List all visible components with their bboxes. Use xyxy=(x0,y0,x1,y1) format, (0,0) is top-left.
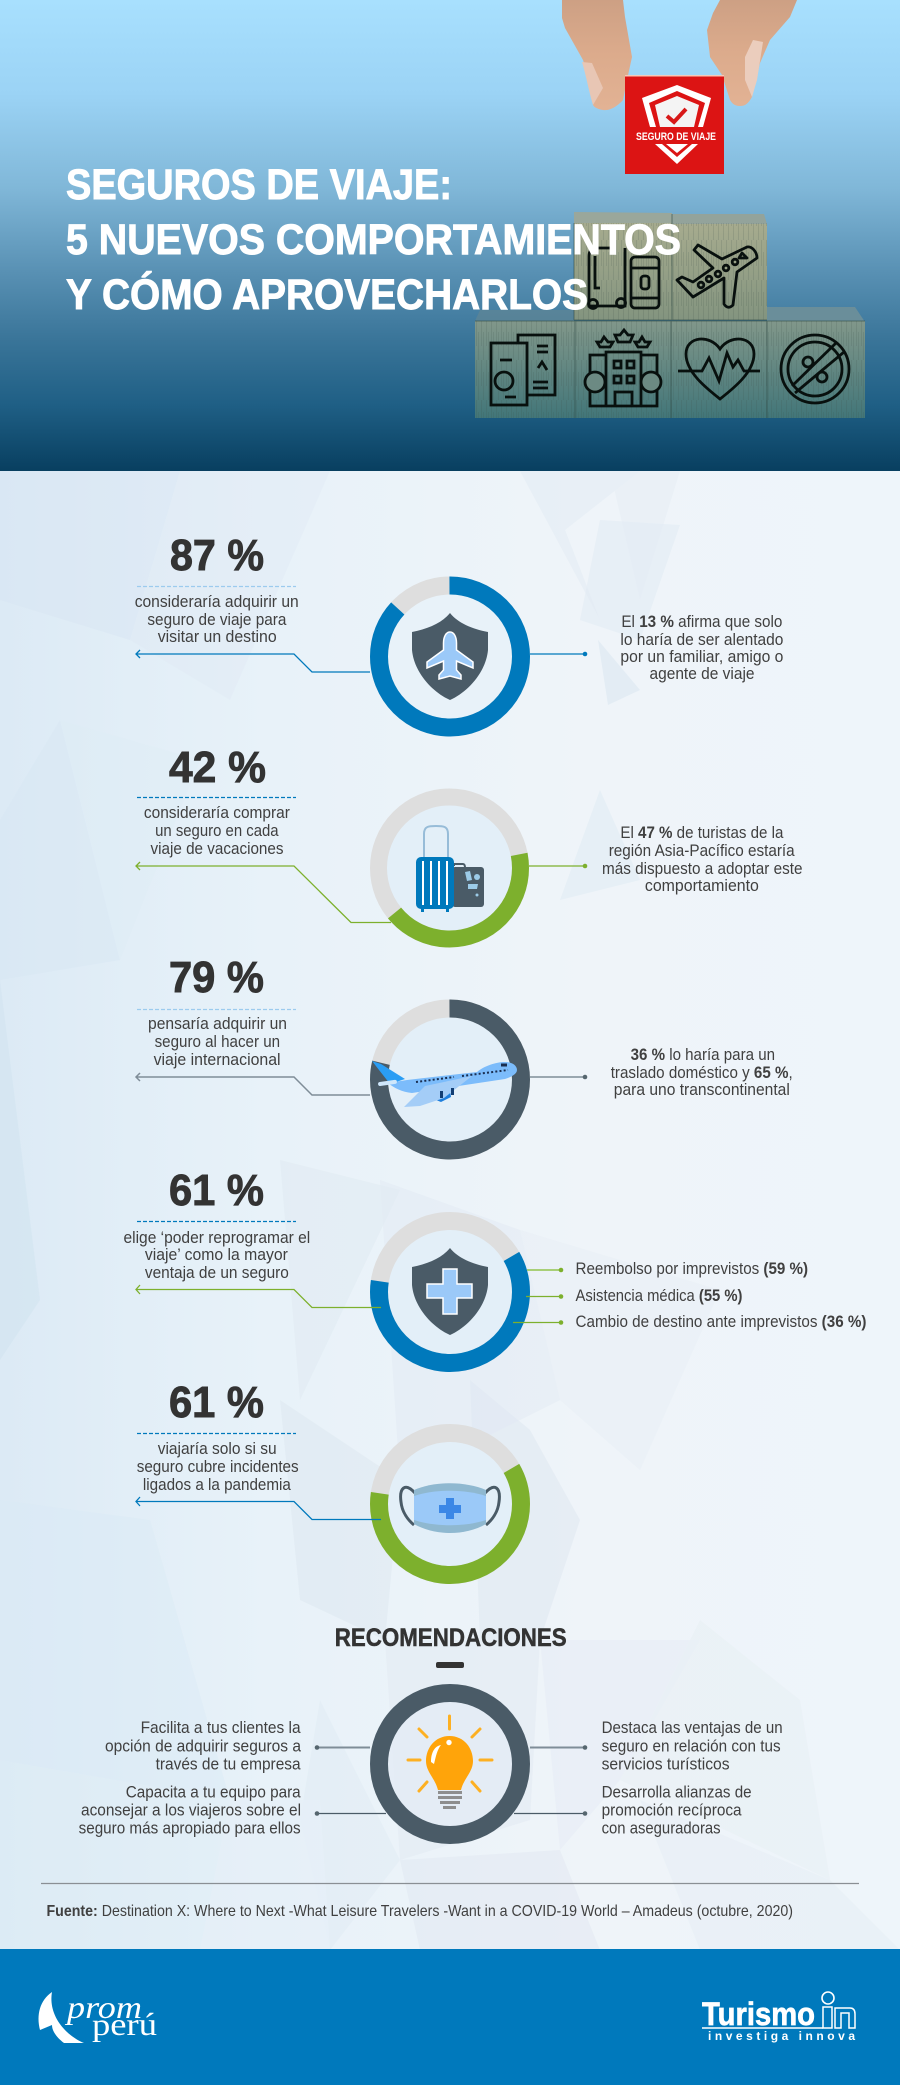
logo: PromPerú xyxy=(38,1989,157,2043)
recommendation: right 1: Destaca las ventajas de un xyxy=(602,1718,783,1737)
icon: shield with cross xyxy=(412,1248,488,1335)
icon: airplane xyxy=(677,245,757,307)
benefit list: Cambio de destino ante imprevistos (36 %) xyxy=(576,1312,866,1331)
description xyxy=(124,1228,310,1282)
recommendation: right 1: servicios turísticos xyxy=(602,1754,730,1774)
logo: PromPerú: perú xyxy=(92,2006,157,2042)
description: visitar un destino xyxy=(158,627,277,646)
benefit list xyxy=(513,1259,866,1331)
icon: hotel with stars xyxy=(585,330,661,406)
arrow left xyxy=(136,1073,370,1095)
panel: 79 % xyxy=(136,953,793,1150)
description: viajaría solo si su xyxy=(158,1439,277,1458)
donut chart xyxy=(378,797,520,939)
description xyxy=(144,803,290,858)
side note: El 13 % afirma que solo xyxy=(621,612,782,631)
title: 5 NUEVOS COMPORTAMIENTOS xyxy=(66,216,681,264)
recommendation: left 1 xyxy=(105,1718,301,1774)
description: un seguro en cada xyxy=(155,821,279,840)
side note xyxy=(602,823,802,895)
recommendation: left 2: aconsejar a los viajeros sobre el xyxy=(81,1800,301,1820)
donut chart xyxy=(379,586,521,728)
side note: más dispuesto a adoptar este xyxy=(602,859,802,878)
recommendation: left 2: Capacita a tu equipo para xyxy=(126,1782,301,1802)
arrow left xyxy=(136,1497,381,1520)
donut chart xyxy=(379,1221,521,1363)
recommendation: left 1: opción de adquirir seguros a xyxy=(105,1736,301,1756)
header photo: hand, red cube and wooden blocks xyxy=(0,0,900,471)
side note: 36 % lo haría para un xyxy=(631,1045,775,1064)
stat number: 61 % xyxy=(169,1166,264,1215)
recommendation: left 1: través de tu empresa xyxy=(156,1754,301,1774)
connector right xyxy=(529,865,585,867)
description: elige ‘poder reprogramar el xyxy=(124,1228,310,1247)
panel: 61 % reprogramar xyxy=(124,1166,866,1363)
side note: región Asia-Pacífico estaría xyxy=(609,841,795,860)
source note: Fuente: Destination X: Where to Next -What Leisure Travelers -Want in a COVID-19 World – Amadeus (octubre, 2020) xyxy=(46,1903,793,1920)
description: consideraría adquirir un xyxy=(135,592,299,611)
donut chart xyxy=(379,1008,521,1150)
icon: heart with pulse xyxy=(678,339,760,399)
benefit list: Asistencia médica (55 %) xyxy=(576,1286,742,1305)
logo: Turismo In: investiga innova xyxy=(708,2029,855,2043)
recommendation: left 2 xyxy=(79,1782,301,1838)
connector right xyxy=(530,653,585,655)
description: seguro de viaje para xyxy=(147,610,287,629)
panel: recomendaciones xyxy=(79,1624,783,1838)
icon: suitcases xyxy=(588,232,659,308)
panel: 61 % pandemia xyxy=(136,1378,521,1575)
icon: fingers xyxy=(562,0,797,110)
title: Y CÓMO APROVECHARLOS xyxy=(66,270,588,319)
benefit list: Reembolso por imprevistos (59 %) xyxy=(576,1259,808,1278)
side note: El 47 % de turistas de la xyxy=(620,823,784,842)
logo: Turismo In: Turismo xyxy=(702,1996,815,2032)
side note xyxy=(620,612,783,683)
icon: shield with plane xyxy=(412,613,488,700)
icon: crossed-out virus xyxy=(781,335,849,403)
recommendation: right 2 xyxy=(602,1782,752,1838)
recommendation: right 2: Desarrolla alianzas de xyxy=(602,1782,752,1802)
heading: RECOMENDACIONES xyxy=(335,1624,567,1652)
icon: face mask xyxy=(401,1483,499,1533)
side note: comportamiento xyxy=(645,876,759,895)
side note: agente de viaje xyxy=(650,664,754,683)
description: ventaja de un seguro xyxy=(145,1263,289,1282)
footer band xyxy=(0,1949,900,2085)
arrow left xyxy=(136,862,391,922)
recommendation: right 2: con aseguradoras xyxy=(602,1818,721,1838)
description xyxy=(137,1439,299,1494)
description xyxy=(148,1014,287,1069)
description: seguro cubre incidentes xyxy=(137,1457,299,1476)
donut chart xyxy=(379,1433,521,1575)
description: viaje’ como la mayor xyxy=(145,1245,288,1264)
recommendation: right 1 xyxy=(602,1718,783,1774)
icon: red insurance cube xyxy=(625,75,724,174)
page background xyxy=(0,471,900,1951)
icon: luggage xyxy=(416,826,484,912)
icon: red insurance cube: SEGURO DE VIAJE xyxy=(636,131,716,143)
side note xyxy=(611,1045,793,1099)
stat number: 79 % xyxy=(169,953,264,1002)
description: viaje de vacaciones xyxy=(150,839,284,858)
description: viaje internacional xyxy=(154,1050,281,1069)
panel: 87 % xyxy=(135,531,783,728)
logo: Turismo In xyxy=(702,1992,855,2043)
arrow left xyxy=(136,650,370,672)
side note: para uno transcontinental xyxy=(614,1080,790,1099)
connectors xyxy=(315,1745,587,1816)
stat number: 61 % xyxy=(169,1378,264,1427)
description: pensaría adquirir un xyxy=(148,1014,287,1033)
side note: lo haría de ser alentado xyxy=(620,630,783,649)
recommendation: right 1: seguro en relación con tus xyxy=(602,1736,781,1756)
side note: por un familiar, amigo o xyxy=(620,647,783,666)
icon: travel documents xyxy=(491,335,555,405)
recommendation: left 1: Facilita a tus clientes la xyxy=(141,1718,301,1737)
title xyxy=(66,161,681,319)
arrow left xyxy=(136,1285,381,1308)
description: consideraría comprar xyxy=(144,803,290,822)
recommendation: right 2: promoción recíproca xyxy=(602,1800,742,1820)
icon: light bulb xyxy=(408,1716,492,1809)
recommendation: left 2: seguro más apropiado para ellos xyxy=(79,1818,301,1838)
connector right xyxy=(530,1076,585,1078)
ring xyxy=(379,1693,521,1835)
description: ligados a la pandemia xyxy=(143,1475,291,1494)
logo: PromPerú: prom xyxy=(65,1989,142,2025)
side note: traslado doméstico y 65 %, xyxy=(611,1063,793,1082)
stat number: 87 % xyxy=(170,531,264,580)
stat number: 42 % xyxy=(169,743,266,792)
wooden blocks with travel icons xyxy=(475,212,865,418)
title: SEGUROS DE VIAJE: xyxy=(66,161,452,209)
icon: airplane xyxy=(372,1061,517,1107)
description xyxy=(135,592,299,646)
description: seguro al hacer un xyxy=(155,1032,280,1051)
panel: 42 % xyxy=(136,743,802,939)
